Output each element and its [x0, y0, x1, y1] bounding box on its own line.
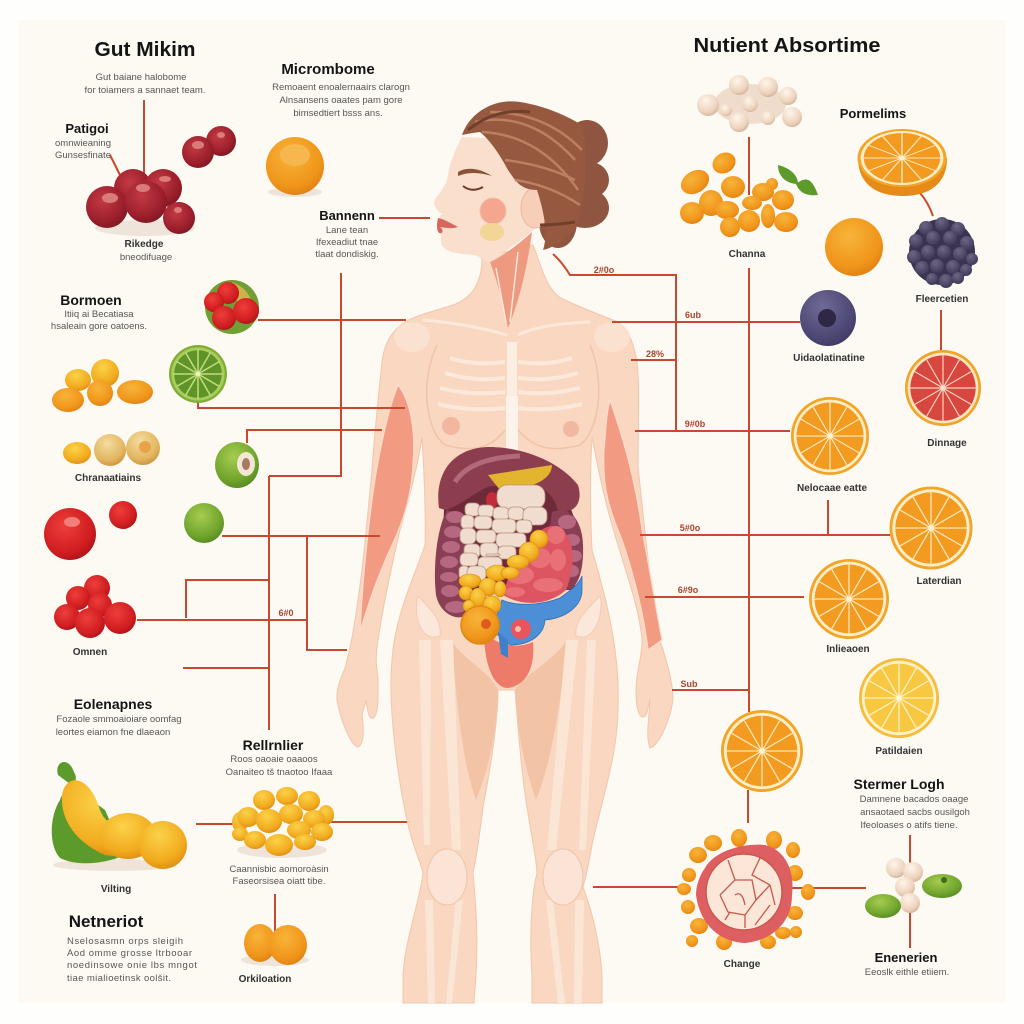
microbiome description: bimsedtiert bsss ans.	[293, 108, 383, 119]
caption: cluster description	[229, 864, 329, 887]
caption: inlieaoen: Inlieaoen	[826, 644, 870, 655]
label: patigoi: Patigoi	[65, 121, 109, 136]
label: patigoi: Gunsesfinate	[55, 150, 111, 161]
caption: chranaatiains: Chranaatiains	[75, 473, 142, 484]
heading: gut: Gut Mikim	[94, 39, 196, 61]
inner thigh shading	[452, 642, 566, 800]
label: stermer logh: Damnene bacados oaage	[860, 794, 968, 805]
small intestine coils	[459, 485, 547, 581]
label: patigoi: omnwieaning	[55, 138, 111, 149]
value labels: 6#9o	[678, 585, 699, 595]
icon: green ball	[184, 503, 224, 543]
microbiome description: Alnsansens oaates pam gore	[279, 95, 403, 106]
caption: channa: Channa	[729, 249, 766, 260]
label: bannenn	[315, 208, 379, 260]
neck tissue	[490, 232, 532, 328]
label: rellrnlier	[226, 737, 333, 778]
eye	[463, 186, 483, 190]
label: rellrnlier: Roos oaoaie oaaoos	[230, 754, 318, 765]
netneriot description	[67, 936, 197, 984]
label: bannenn: Lane tean	[326, 225, 368, 236]
caption: vilting: Vilting	[101, 884, 131, 895]
icon: halved orange	[858, 129, 947, 196]
value labels: 2#0o	[594, 265, 615, 275]
value label: 6#0	[278, 608, 294, 618]
caption: cluster description: Faseorsisea oiatt tibe.	[233, 876, 325, 887]
eyebrow	[458, 169, 492, 176]
label: stermer logh	[853, 776, 970, 831]
body silhouette	[337, 245, 673, 1003]
microbiome description: Remoaent enoalernaairs clarogn	[272, 82, 410, 93]
abdominal backdrop	[440, 480, 575, 590]
caption: dinnage: Dinnage	[927, 438, 967, 449]
heading: netneriot: Netneriot	[69, 912, 144, 931]
icon: red balls	[44, 501, 137, 560]
head and face	[434, 137, 540, 263]
label: eolenapnes: Eolenapnes	[74, 696, 152, 712]
connector lines	[110, 100, 941, 948]
icon: orange slice two	[890, 486, 972, 570]
caption: orkiloation: Orkiloation	[239, 974, 291, 985]
label: rellrnlier: Rellrnlier	[243, 737, 304, 753]
label: pormelims: Pormelims	[840, 106, 906, 121]
icon: yellow squash	[52, 762, 187, 871]
caption: nelocaae eatte: Nelocaae eatte	[797, 483, 867, 494]
rib cage	[423, 320, 590, 470]
label: bormoen	[51, 292, 147, 332]
label: bannenn: Bannenn	[319, 208, 375, 223]
microbiome description	[272, 82, 410, 119]
gallbladder	[486, 492, 498, 508]
jaw patch	[480, 223, 504, 241]
red small intestine	[503, 526, 573, 603]
gut description	[85, 72, 205, 96]
cecum	[461, 606, 499, 644]
icon: orange pieces	[52, 359, 153, 412]
heading: microbiome: Micrombome	[281, 61, 375, 78]
icon: green fruit with white cut	[215, 442, 259, 488]
label: enenerien	[865, 950, 949, 978]
icon: red berries group	[54, 575, 136, 638]
colon haustra	[440, 511, 582, 613]
nipples	[442, 417, 579, 437]
label: stermer logh: ansaotaed sacbs ousilgoh	[860, 807, 970, 818]
icon: two orange balls	[241, 924, 309, 966]
hair bun	[539, 120, 609, 248]
label: bannenn: Ifexeadiut tnae	[316, 237, 378, 248]
liver	[438, 447, 580, 511]
caption: fleercetien: Fleercetien	[916, 294, 968, 305]
label: patigoi	[55, 121, 111, 161]
value labels	[594, 265, 706, 689]
cheek	[480, 198, 506, 224]
lips	[437, 218, 458, 233]
gut description: for toiamers a sannaet team.	[85, 85, 205, 96]
icon: red berry cluster	[86, 169, 195, 236]
label: eolenapnes: leortes eiamon fne dlaeaon	[56, 727, 170, 738]
icon: orange slice one	[791, 397, 869, 475]
netneriot description: Nselosasmn orps sleigih	[67, 936, 183, 947]
icon: green leaf	[778, 165, 818, 195]
icon: yellow pods	[63, 431, 160, 466]
label: bormoen: Itiiq ai Becatiasa	[64, 309, 134, 320]
icon: orange slice three	[809, 559, 889, 639]
pelvis bones	[417, 596, 601, 637]
netneriot description: noedinsowe onie lbs mngot	[67, 960, 197, 971]
icon: pale balls and green pods	[865, 858, 962, 918]
value labels: 28%	[646, 349, 664, 359]
label: bormoen: hsaleain gore oatoens.	[51, 321, 147, 332]
label: enenerien: Enenerien	[875, 950, 937, 965]
icon: red and green fruit	[204, 280, 259, 334]
caption: laterdian: Laterdian	[916, 576, 962, 587]
label: stermer logh: Stermer Logh	[853, 776, 945, 792]
netneriot description: Aod omme grosse ltrbooar	[67, 948, 192, 959]
rectum	[484, 632, 533, 688]
appendix loop	[511, 619, 531, 639]
icon: intestinal cross section	[677, 829, 815, 950]
label: rellrnlier: Oanaiteo tš tnaotoo Ifaaa	[226, 767, 333, 778]
label: bannenn: tlaat dondiskig.	[315, 249, 379, 260]
value labels: Sub	[680, 679, 698, 689]
blue colon	[494, 576, 582, 645]
caption: cluster description: Caannisbic aomoroàsin	[229, 864, 329, 875]
icon: orange	[266, 137, 324, 197]
leg bones	[419, 640, 596, 1003]
icon: yellow citrus slice	[859, 658, 939, 738]
neck tissue stripes	[496, 252, 518, 322]
label: stermer logh: Ifeoloases o atifs tiene.	[860, 820, 958, 831]
value labels: 9#0b	[685, 419, 706, 429]
icon: two red berries	[182, 126, 236, 168]
gut description: Gut baiane halobome	[96, 72, 186, 83]
caption: berries: bneodifuage	[120, 252, 172, 263]
blue stem	[498, 632, 508, 658]
hair	[462, 101, 586, 250]
knee caps	[427, 849, 583, 905]
caption: omnen: Omnen	[73, 647, 107, 658]
gallbladder band	[488, 465, 552, 490]
icon: red citrus slice	[905, 350, 981, 426]
icon: purple fruit	[800, 290, 856, 346]
icon: pale nut cluster	[697, 75, 802, 132]
icon: dark blackberry	[907, 217, 978, 288]
caption: change: Change	[724, 959, 761, 970]
cecum opening	[481, 619, 491, 629]
icon: orange slice four	[721, 710, 803, 792]
label: enenerien: Eeoslk eithle etiiem.	[865, 967, 949, 978]
icon: orange bean cluster	[677, 148, 798, 237]
digestive organs	[435, 447, 583, 688]
human body figure	[337, 101, 673, 1003]
appendix center	[515, 626, 521, 632]
icon: orange ball	[825, 218, 883, 276]
arm muscles	[360, 385, 662, 650]
caption: uidaolatinatine: Uidaolatinatine	[793, 353, 865, 364]
value labels: 5#0o	[680, 523, 701, 533]
icon: lime slice	[169, 345, 227, 403]
label: eolenapnes	[56, 696, 182, 738]
label: eolenapnes: Fozaole smmoaioiare oomfag	[56, 714, 182, 725]
descending colon	[435, 510, 470, 617]
label: bormoen: Bormoen	[60, 292, 122, 308]
value labels: 6ub	[685, 310, 701, 320]
caption: berries	[120, 239, 172, 263]
netneriot description: tiae mialioetinsk oolšit.	[67, 973, 171, 984]
caption: patildaien: Patildaien	[875, 746, 923, 757]
icon: yellow bean cluster	[232, 787, 334, 858]
caption: berries: Rikedge	[125, 239, 164, 250]
chest outline shading	[427, 345, 599, 449]
shoulder joints	[394, 322, 630, 352]
yellow intestine	[459, 530, 548, 614]
ear	[521, 188, 549, 228]
heading: nutrient absorption: Nutient Absortime	[694, 35, 880, 57]
